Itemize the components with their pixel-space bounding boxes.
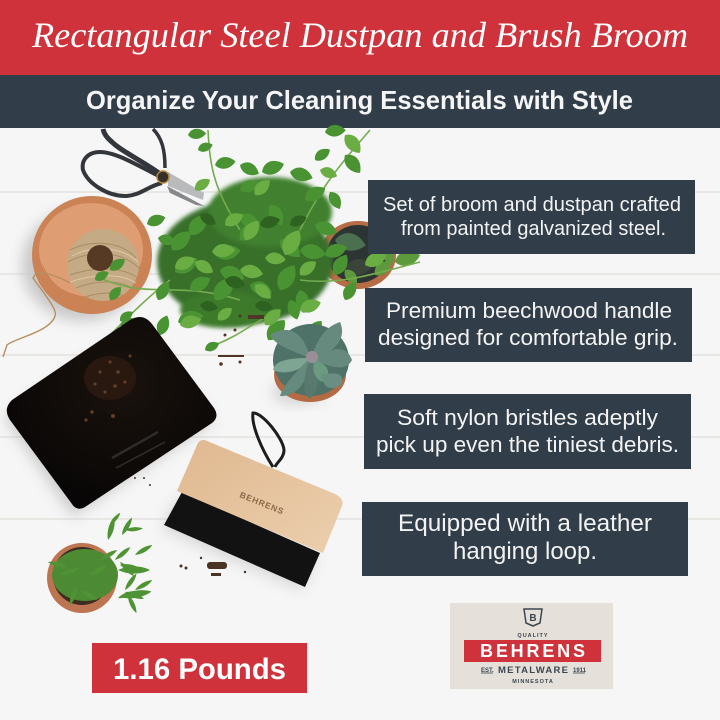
photo: right pot with dark succulent — [320, 221, 422, 289]
feature box 2 — [365, 288, 692, 362]
logo: Behrens Metalware: BEHRENS — [480, 641, 585, 661]
feature box 1 — [368, 180, 695, 254]
logo: Behrens Metalware: 1911 — [573, 668, 587, 674]
photo: twine ball — [3, 229, 139, 357]
logo: Behrens Metalware: EST. — [481, 668, 494, 674]
bristles — [164, 492, 320, 587]
photo: brush with leather loop: BEHRENS — [238, 490, 286, 517]
weight badge: 1.16 Pounds — [113, 653, 286, 686]
feature box 3 — [364, 394, 691, 469]
photo: scissors — [83, 129, 204, 206]
logo: Behrens Metalware: QUALITY — [517, 633, 549, 639]
subtitle: Organize Your Cleaning Essentials with Style — [86, 85, 633, 115]
title: Rectangular Steel Dustpan and Brush Broom — [31, 15, 688, 55]
logo: Behrens Metalware — [450, 603, 613, 689]
logo: Behrens Metalware: METALWARE — [498, 665, 568, 676]
feature box 2: Premium beechwood handle — [386, 298, 672, 323]
icon: logo crest — [524, 609, 542, 626]
title banner — [0, 0, 720, 75]
photo: green plant — [93, 124, 420, 366]
feature box 1: from painted galvanized steel. — [401, 218, 666, 240]
subtitle banner — [0, 75, 720, 128]
photo: brush with leather loop — [161, 413, 343, 591]
feature box 2: designed for comfortable grip. — [378, 325, 678, 350]
feature box 4 — [362, 502, 688, 576]
logo: Behrens Metalware: MINNESOTA — [512, 679, 554, 685]
photo: succulent in front — [270, 322, 352, 404]
feature box 4: hanging loop. — [453, 538, 597, 565]
icon: logo crest: B — [529, 613, 537, 624]
photo: terracotta plate — [22, 196, 152, 321]
weight badge — [92, 643, 307, 693]
feature box 4: Equipped with a leather — [398, 510, 652, 537]
photo: small herb pot — [47, 512, 153, 614]
photo: soil crumbs — [134, 477, 246, 576]
wood head — [177, 440, 343, 553]
feature box 3: Soft nylon bristles adeptly — [397, 405, 658, 430]
feature box 1: Set of broom and dustpan crafted — [383, 194, 681, 216]
icon: leather loop — [253, 413, 284, 467]
photo: black dustpan — [4, 317, 216, 517]
feature box 3: pick up even the tiniest debris. — [376, 432, 679, 457]
